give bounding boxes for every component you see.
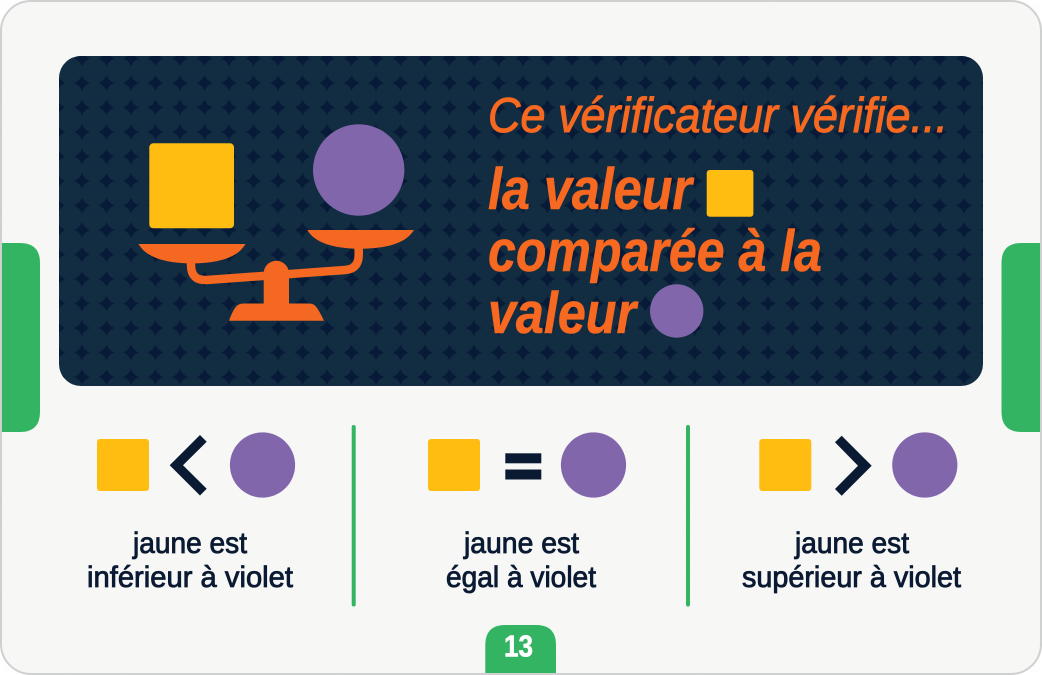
column: less than bbox=[87, 432, 295, 594]
heading text bbox=[488, 89, 948, 346]
yellow square bbox=[428, 439, 480, 491]
caption: jaune est bbox=[794, 527, 910, 560]
left green tab bbox=[2, 243, 40, 432]
icon: balance scale bbox=[138, 124, 414, 321]
greater-than sign bbox=[835, 436, 872, 496]
caption: jaune est bbox=[463, 527, 580, 560]
panel: dark header bbox=[59, 56, 983, 386]
divider left bbox=[352, 425, 356, 606]
caption bbox=[87, 527, 294, 594]
caption: inférieur à violet bbox=[87, 561, 294, 594]
heading line: la valeur: la valeur bbox=[488, 157, 695, 222]
purple circle on scale bbox=[313, 124, 404, 216]
caption bbox=[446, 527, 597, 594]
divider right bbox=[686, 425, 690, 606]
purple circle bbox=[892, 432, 957, 498]
caption: égal à violet bbox=[446, 561, 597, 594]
equals sign bbox=[505, 453, 541, 480]
right green tab bbox=[1002, 243, 1040, 432]
purple circle bbox=[561, 432, 626, 498]
heading line: valeur: valeur bbox=[488, 281, 639, 346]
yellow square bbox=[759, 439, 811, 491]
column: greater than bbox=[742, 432, 962, 594]
yellow square on scale bbox=[149, 143, 234, 228]
caption: supérieur à violet bbox=[742, 561, 962, 594]
caption bbox=[742, 527, 962, 594]
yellow square bbox=[97, 439, 149, 491]
purple circle bbox=[230, 432, 295, 498]
page number: 13 bbox=[504, 629, 533, 664]
less-than sign bbox=[170, 435, 207, 496]
icon: purple circle inline bbox=[650, 284, 703, 338]
page number tab bbox=[485, 625, 556, 673]
column: equal bbox=[428, 432, 626, 594]
icon: yellow square inline bbox=[707, 170, 753, 217]
heading line: comparée à la: comparée à la bbox=[488, 219, 822, 284]
scale body bbox=[138, 230, 414, 321]
heading line: intro: Ce vérificateur vérifie... bbox=[488, 89, 948, 143]
caption: jaune est bbox=[132, 527, 248, 560]
